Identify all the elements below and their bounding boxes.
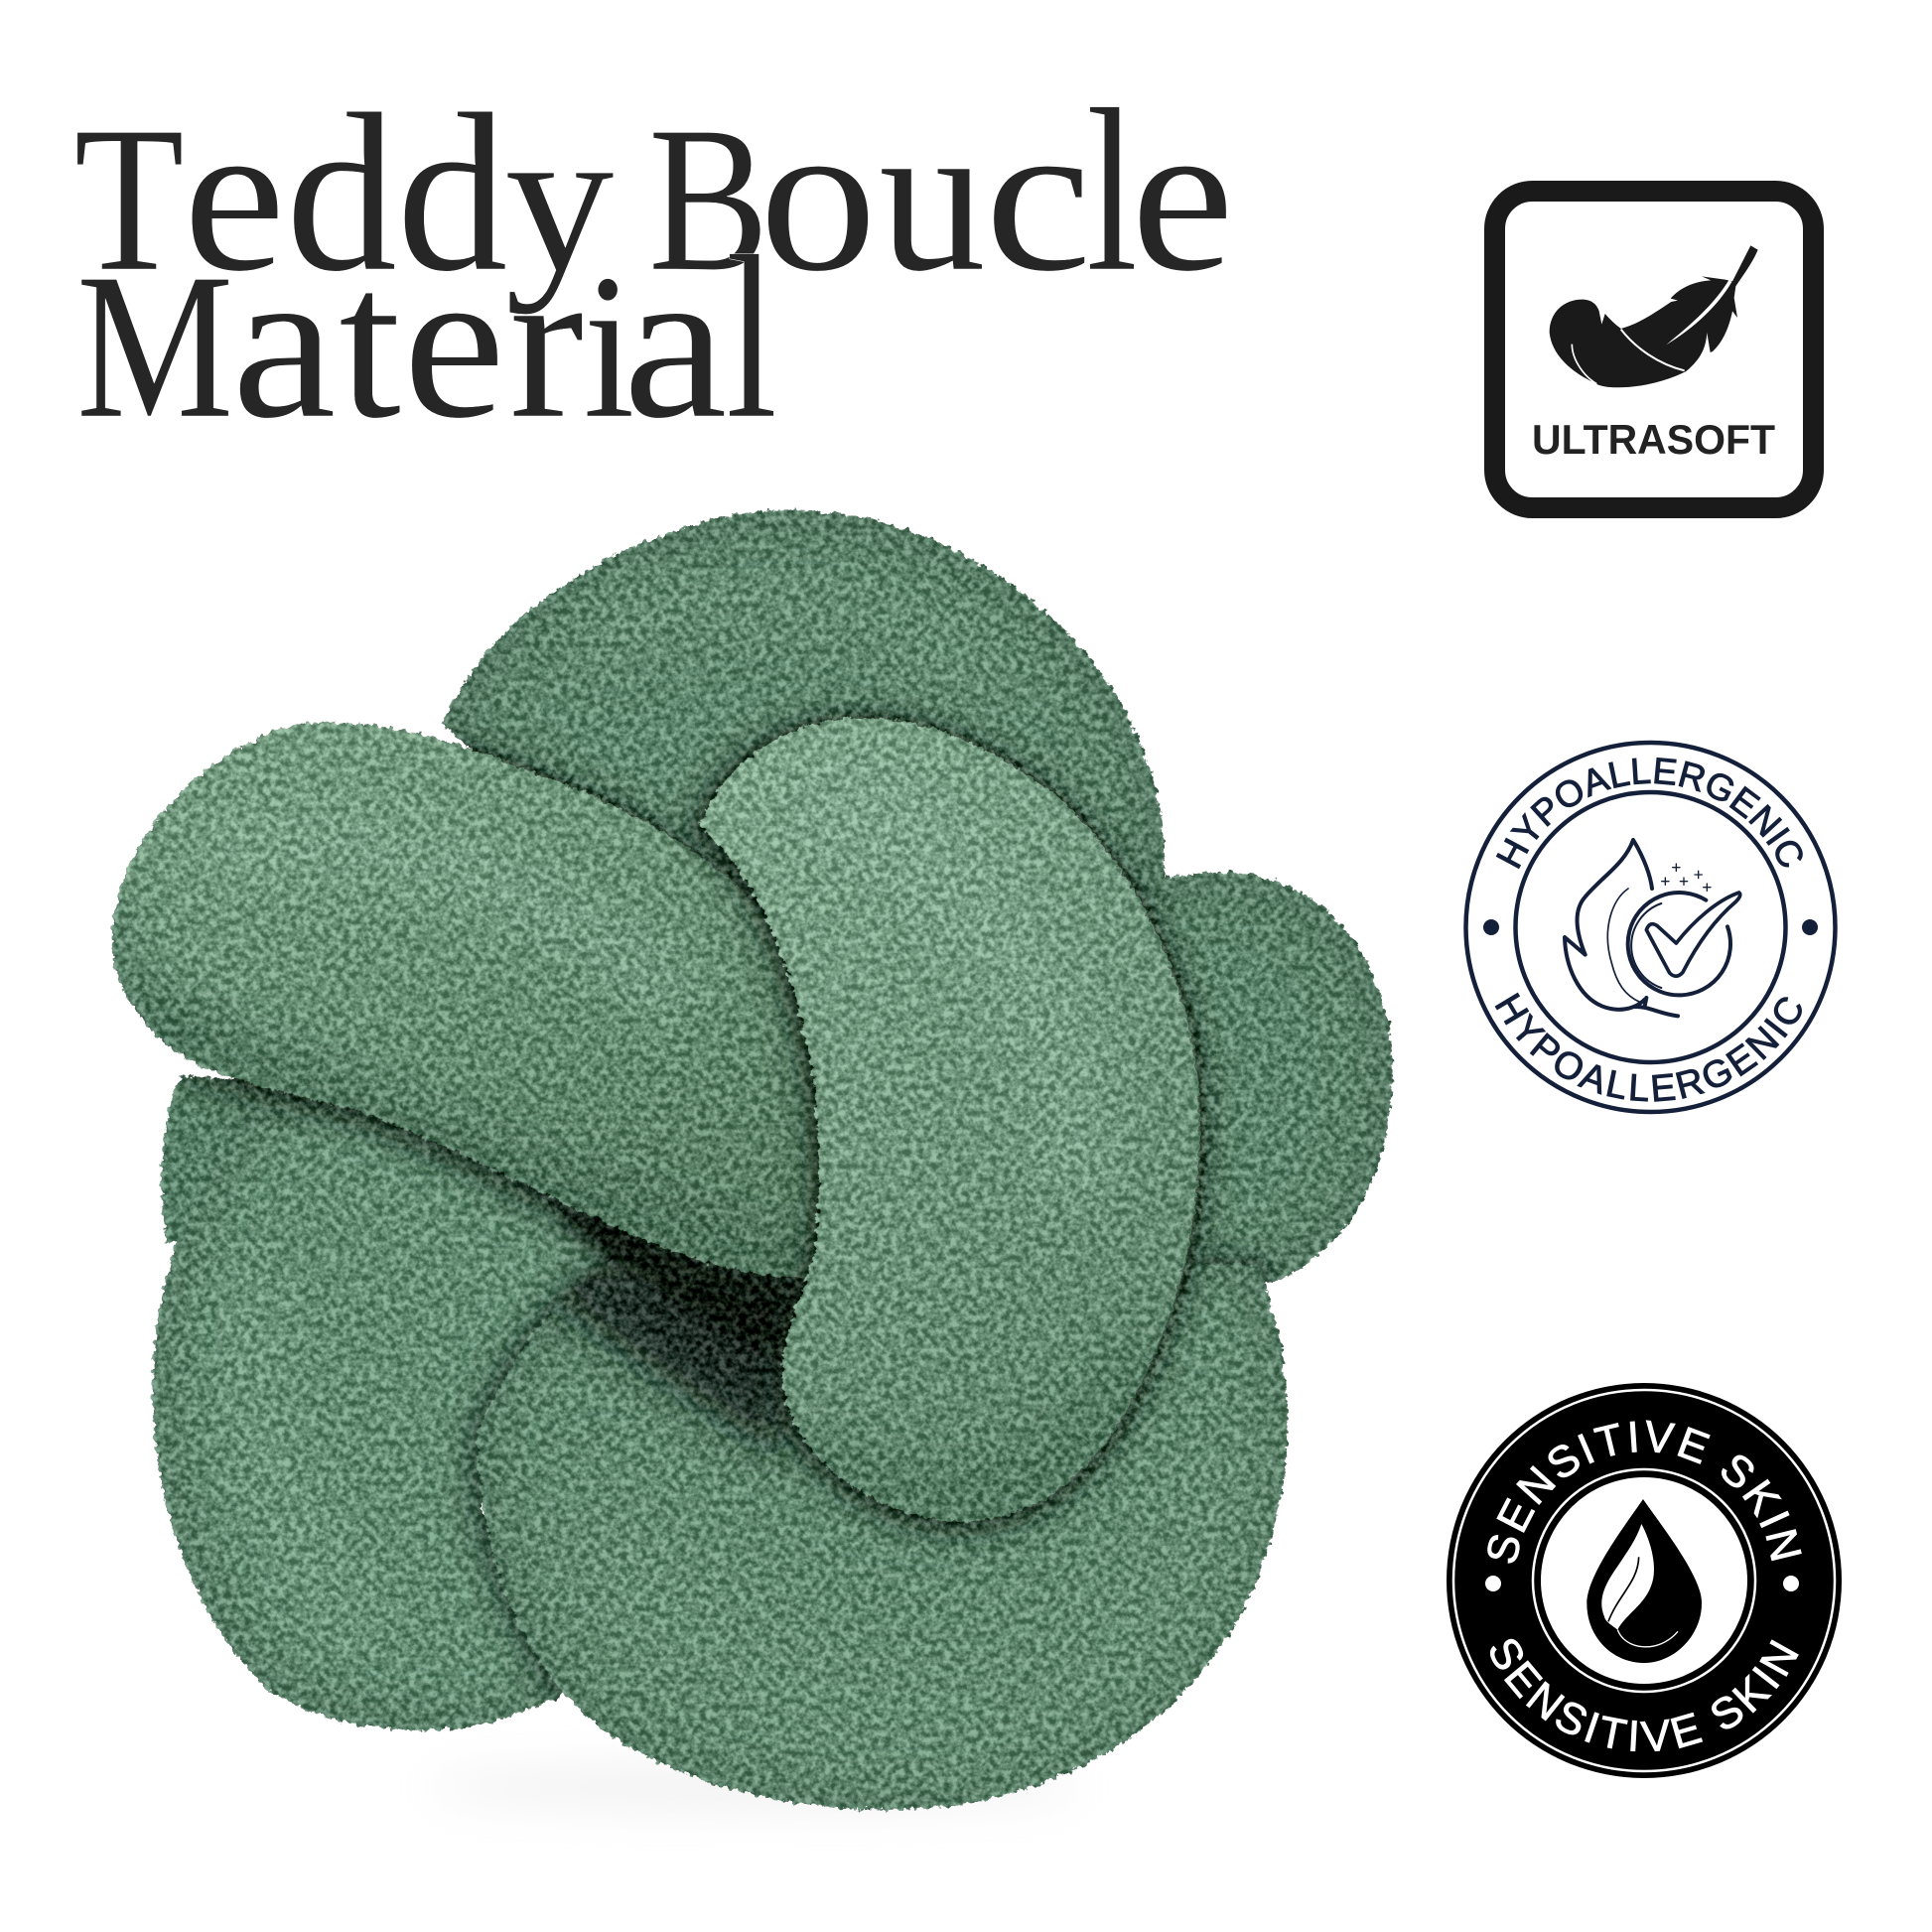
- curved text bottom: HYPOALLERGENIC: [1495, 993, 1802, 1102]
- shadow of upper tube: [112, 723, 833, 1285]
- side dots: [1483, 919, 1818, 935]
- title: l: [726, 207, 777, 467]
- shadow onto lower left lobe: [477, 1243, 1288, 1810]
- label: ultrasoft: ULTRASOFT: [1532, 416, 1775, 463]
- icon: leaf with check: [1565, 840, 1740, 1016]
- badge: sensitive skin: [1447, 1383, 1842, 1778]
- lower left lobe: [153, 1080, 615, 1730]
- title: d: [286, 67, 397, 319]
- title: o: [759, 74, 877, 317]
- title: l: [1086, 61, 1138, 320]
- icon: drop with leaf: [1587, 1499, 1702, 1663]
- thin outer ring: [1453, 1390, 1835, 1771]
- shade in knot centre: [511, 1260, 820, 1457]
- curved text top: HYPOALLERGENIC: [1495, 757, 1803, 870]
- title: u: [879, 74, 986, 317]
- bottom front arc: [477, 1243, 1288, 1810]
- back top arc: [441, 508, 1166, 897]
- title: y: [504, 82, 614, 315]
- dark underlay filling gaps between tubes: [228, 797, 1129, 1398]
- title: M: [76, 230, 233, 462]
- title: e: [183, 74, 286, 317]
- white centre: [1541, 1477, 1747, 1684]
- black disc: [1447, 1383, 1842, 1778]
- badge frame: [1495, 191, 1813, 508]
- right lobe: [1135, 869, 1395, 1283]
- badge: hypoallergenic: [1463, 741, 1838, 1114]
- side dots: [1485, 1576, 1799, 1591]
- title: T: [74, 83, 185, 315]
- upper left tube: [106, 723, 833, 1278]
- shadow of front tube: [698, 718, 1199, 1526]
- dark crevice at knot centre: [554, 1217, 820, 1363]
- curved text bottom: SENSITIVE SKIN: [1489, 1638, 1799, 1751]
- title: d: [396, 67, 508, 319]
- title: c: [985, 74, 1092, 317]
- title: e: [1131, 74, 1234, 317]
- icon: feather: [1550, 245, 1758, 387]
- front curved tube: [700, 718, 1199, 1522]
- badge: ultrasoft: [1495, 191, 1813, 508]
- title: B: [648, 83, 769, 315]
- outer ring: [1465, 743, 1835, 1112]
- inner ring: [1533, 1469, 1755, 1692]
- knot cushion photo illustration: [106, 510, 1393, 1810]
- inner ring: [1515, 792, 1785, 1062]
- title: a: [231, 221, 337, 464]
- title: t: [339, 221, 401, 464]
- title: e: [403, 221, 505, 464]
- back left sliver: [159, 1074, 286, 1245]
- title: i: [584, 231, 634, 461]
- title: r: [509, 221, 584, 464]
- title: [74, 61, 1234, 467]
- title: a: [622, 221, 728, 464]
- ground shadow under knot: [427, 1765, 1082, 1809]
- curved text top: SENSITIVE SKIN: [1487, 1420, 1802, 1564]
